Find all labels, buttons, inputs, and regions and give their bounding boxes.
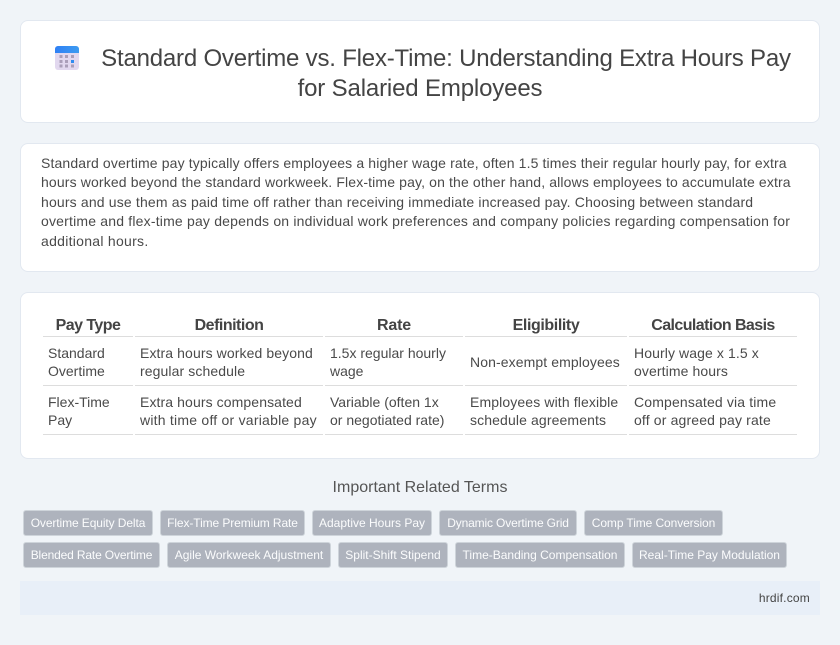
tag: Comp Time Conversion [592,516,715,530]
tag: Blended Rate Overtime [31,548,152,562]
table row: flex-time pay: off or agreed pay rate [634,412,771,428]
tag [160,510,305,536]
table header row: Definition [195,317,263,334]
tag [167,542,331,568]
comparison table panel [20,292,820,459]
intro paragraph: overtime and flex-time pay depends on individual work preferences and company policies regarding compensation for [41,213,790,229]
tag: Split-Shift Stipend [345,548,441,562]
tag: Time-Banding Compensation [463,548,617,562]
table row: standard overtime: Extra hours worked beyond [140,345,313,361]
intro text panel [20,143,820,272]
table row: standard overtime: regular schedule [140,363,245,379]
table header row: Calculation Basis [651,317,775,334]
footer source text: hrdif.com [759,591,810,605]
tag: Real-Time Pay Modulation [639,548,780,562]
table row: flex-time pay: Variable (often 1x [330,394,439,410]
title [101,45,791,102]
intro paragraph: hours worked beyond the standard workweek. Flex-time pay, on the other hand, allows employees to accumulate extra [41,174,791,190]
tag: Dynamic Overtime Grid [447,516,569,530]
table row: flex-time pay: schedule agreements [470,412,606,428]
tag [632,542,787,568]
table row: flex-time pay [43,394,797,435]
table row: flex-time pay: Pay [48,412,72,428]
tag: Agile Workweek Adjustment [175,548,323,562]
table row: flex-time pay: Compensated via time [634,394,776,410]
related terms tags [23,510,787,568]
intro paragraph: hours and use them as paid time off rather than receiving immediate increased pay. Choosing between standard [41,194,753,210]
table row: flex-time pay: or negotiated rate) [330,412,444,428]
table row: flex-time pay: Employees with flexible [470,394,618,410]
title: Standard Overtime vs. Flex-Time: Understanding Extra Hours Pay [101,45,791,72]
footer bar [20,581,820,615]
table row: standard overtime: wage [330,363,363,379]
table row: flex-time pay: with time off or variable pay [140,412,317,428]
table row: standard overtime: Standard [48,345,105,361]
tag: Flex-Time Premium Rate [167,516,298,530]
tag [584,510,723,536]
table header row [43,317,797,337]
header panel [20,20,820,123]
tag: Adaptive Hours Pay [319,516,425,530]
tag [23,542,160,568]
table row: flex-time pay: Flex-Time [48,394,110,410]
table row: standard overtime [43,345,797,386]
tag [23,510,153,536]
table row: flex-time pay: Extra hours compensated [140,394,302,410]
title: for Salaried Employees [298,75,542,102]
table row: standard overtime: 1.5x regular hourly [330,345,446,361]
icon: calendar [55,46,79,70]
tag: Overtime Equity Delta [31,516,145,530]
tag [338,542,448,568]
table header row: Eligibility [513,317,579,334]
table row: standard overtime: Overtime [48,363,105,379]
table header row: Pay Type [56,317,120,334]
intro paragraph [41,155,791,249]
intro paragraph: Standard overtime pay typically offers employees a higher wage rate, often 1.5 times their regular hourly pay, for extra [41,155,787,171]
table row: standard overtime: overtime hours [634,363,728,379]
table header row: Rate [377,317,411,334]
tag [455,542,625,568]
tag [312,510,432,536]
intro paragraph: additional hours. [41,233,148,249]
table row: standard overtime: Non-exempt employees [470,354,620,370]
tag [439,510,577,536]
table row: standard overtime: Hourly wage x 1.5 x [634,345,759,361]
related terms heading: Important Related Terms [333,479,507,496]
